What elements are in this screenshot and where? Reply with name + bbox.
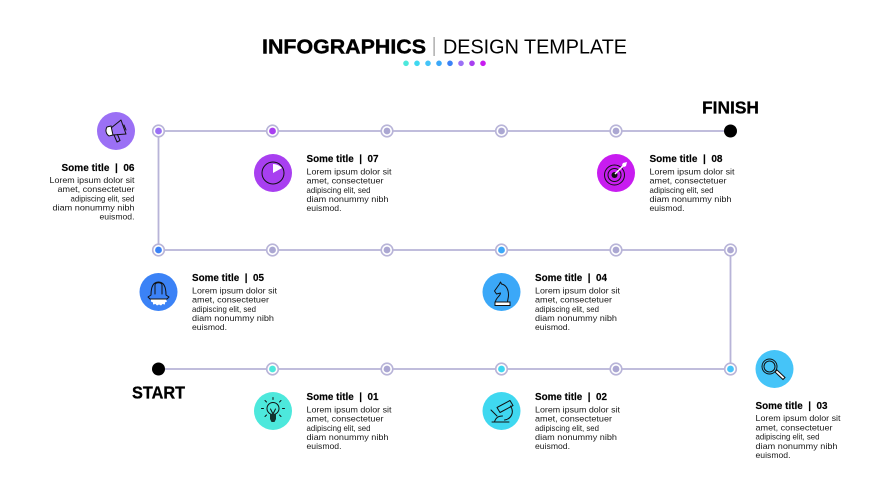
icon: chess knight bbox=[482, 273, 520, 311]
text: step 07 bbox=[306, 153, 392, 213]
icon: microscope bbox=[482, 392, 520, 430]
text: step 05: adipiscing elit, sed bbox=[192, 304, 256, 314]
text: step 01: Lorem ipsum dolor sit bbox=[306, 404, 392, 414]
text: step 06 bbox=[50, 162, 135, 222]
text: step 01 bbox=[306, 391, 392, 451]
start marker: START bbox=[132, 382, 185, 402]
text: step 02: euismod. bbox=[535, 441, 570, 451]
icon: megaphone bbox=[97, 112, 135, 150]
text: step 06: diam nonummy nibh bbox=[52, 202, 135, 212]
text: step 03: amet, consectetuer bbox=[756, 422, 833, 432]
panel: step 02 bbox=[482, 391, 621, 451]
text: step 05: diam nonummy nibh bbox=[192, 313, 274, 323]
icon: helmet and gear bbox=[140, 273, 178, 311]
text: step 02: diam nonummy nibh bbox=[535, 432, 617, 442]
text: step 05: Lorem ipsum dolor sit bbox=[192, 286, 278, 296]
icon: target with dart bbox=[597, 154, 635, 192]
text: step 08: euismod. bbox=[650, 203, 684, 213]
text: step 02: adipiscing elit, sed bbox=[535, 423, 599, 433]
timeline nodes: top row bbox=[153, 125, 622, 137]
timeline nodes: middle row bbox=[153, 244, 736, 256]
text: step 08: diam nonummy nibh bbox=[650, 194, 732, 204]
text: step 07: amet, consectetuer bbox=[306, 176, 384, 186]
panel: step 03 bbox=[756, 350, 841, 460]
text: step 01: diam nonummy nibh bbox=[306, 432, 389, 442]
title accent dots bbox=[403, 60, 486, 66]
text: step 07: adipiscing elit, sed bbox=[306, 185, 371, 195]
text: step 06: euismod. bbox=[100, 212, 134, 222]
panel: step 01 bbox=[254, 391, 392, 451]
text: step 02 bbox=[535, 391, 621, 451]
text: step 03: diam nonummy nibh bbox=[756, 441, 838, 451]
timeline nodes: bottom row bbox=[267, 363, 736, 375]
text: step 04: diam nonummy nibh bbox=[535, 313, 617, 323]
text: step 04: adipiscing elit, sed bbox=[535, 304, 599, 314]
text: step 02: Some title | 02 bbox=[535, 391, 607, 403]
panel: step 08 bbox=[597, 153, 735, 213]
text: step 08 bbox=[650, 153, 735, 213]
text: step 06: adipiscing elit, sed bbox=[70, 193, 135, 203]
text: step 02: amet, consectetuer bbox=[535, 414, 612, 424]
text: step 08: Lorem ipsum dolor sit bbox=[650, 166, 735, 176]
title bbox=[262, 36, 627, 58]
title: DESIGN TEMPLATE bbox=[443, 36, 627, 58]
finish marker bbox=[702, 98, 759, 138]
text: step 06: amet, consectetuer bbox=[58, 184, 135, 194]
text: step 07: Lorem ipsum dolor sit bbox=[306, 166, 392, 176]
timeline path bbox=[158, 131, 730, 369]
text: step 03 bbox=[756, 400, 841, 460]
text: step 02: Lorem ipsum dolor sit bbox=[535, 404, 621, 414]
text: step 01: euismod. bbox=[306, 441, 342, 451]
panel: step 05 bbox=[140, 272, 278, 332]
text: step 01: amet, consectetuer bbox=[306, 414, 384, 424]
finish marker: FINISH bbox=[702, 98, 759, 118]
icon: pie clock bbox=[254, 154, 292, 192]
text: step 07: diam nonummy nibh bbox=[306, 194, 389, 204]
text: step 01: adipiscing elit, sed bbox=[306, 423, 371, 433]
text: step 05: amet, consectetuer bbox=[192, 295, 269, 305]
text: step 03: Some title | 03 bbox=[756, 400, 828, 412]
text: step 06: Some title | 06 bbox=[62, 162, 135, 174]
panel: step 04 bbox=[482, 272, 621, 332]
title: INFOGRAPHICS bbox=[262, 36, 426, 58]
panel: step 06 bbox=[50, 112, 135, 222]
panel: step 07 bbox=[254, 153, 392, 213]
icon: magnifying glass bbox=[756, 350, 794, 388]
text: step 04: Some title | 04 bbox=[535, 272, 607, 284]
start marker bbox=[132, 362, 185, 402]
text: step 08: adipiscing elit, sed bbox=[650, 185, 714, 195]
text: step 04: amet, consectetuer bbox=[535, 295, 612, 305]
text: step 06: Lorem ipsum dolor sit bbox=[50, 175, 135, 185]
text: step 04: Lorem ipsum dolor sit bbox=[535, 286, 621, 296]
text: step 01: Some title | 01 bbox=[306, 391, 379, 403]
text: step 03: Lorem ipsum dolor sit bbox=[756, 413, 841, 423]
text: step 04 bbox=[535, 272, 621, 332]
text: step 08: amet, consectetuer bbox=[650, 176, 727, 186]
text: step 03: adipiscing elit, sed bbox=[756, 432, 820, 442]
icon: light bulb bbox=[254, 392, 292, 430]
text: step 03: euismod. bbox=[756, 450, 790, 460]
text: step 08: Some title | 08 bbox=[650, 153, 723, 165]
text: step 05 bbox=[192, 272, 278, 332]
text: step 07: euismod. bbox=[306, 203, 342, 213]
text: step 05: Some title | 05 bbox=[192, 272, 264, 284]
text: step 04: euismod. bbox=[535, 322, 570, 332]
text: step 05: euismod. bbox=[192, 322, 227, 332]
text: step 07: Some title | 07 bbox=[306, 153, 379, 165]
